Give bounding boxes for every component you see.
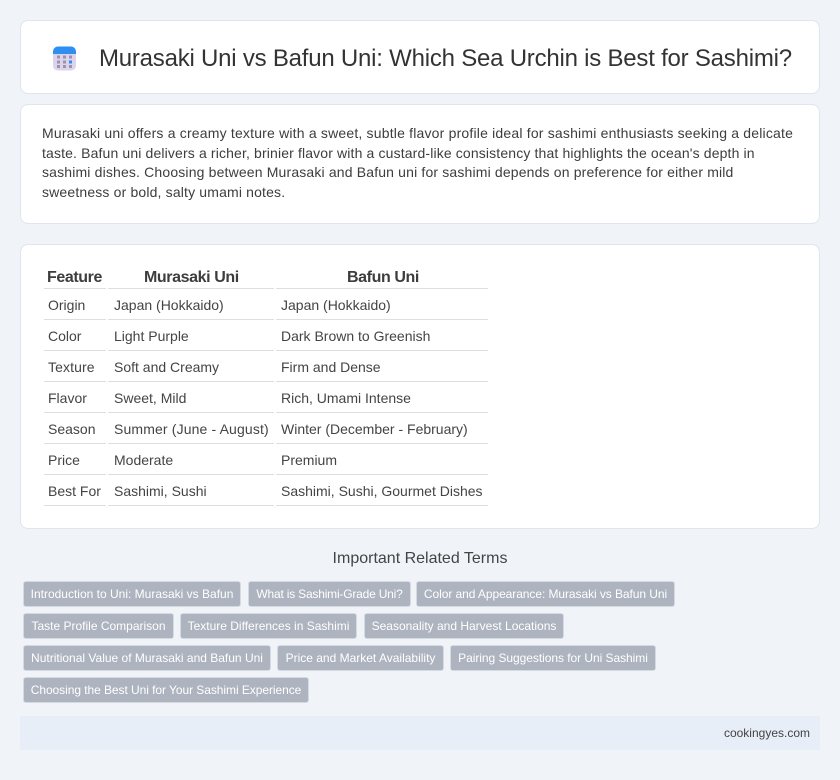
intro paragraph: Murasaki uni offers a creamy texture with a sweet, subtle flavor profile ideal for sashimi enthusiasts seeking a delicate [42, 125, 793, 141]
row: flavor: Sweet, Mild [114, 390, 186, 406]
row: best for: Best For [48, 483, 101, 499]
row: flavor: Flavor [48, 390, 87, 406]
table header: Bafun Uni [347, 269, 419, 286]
related terms heading: Important Related Terms [333, 550, 507, 567]
intro paragraph: sweetness or bold, salty umami notes. [42, 184, 285, 200]
row: season: Winter (December - February) [281, 421, 468, 437]
row: origin: Japan (Hokkaido) [114, 297, 224, 313]
tag [180, 613, 357, 639]
row: texture: Texture [48, 359, 95, 375]
comparison table [44, 269, 488, 506]
row: origin [44, 297, 488, 320]
tag [248, 581, 411, 607]
row: origin: Japan (Hokkaido) [281, 297, 391, 313]
tag [450, 645, 656, 671]
row: texture: Firm and Dense [281, 359, 381, 375]
row: price: Price [48, 452, 80, 468]
row: texture [44, 359, 488, 382]
tag: Texture Differences in Sashimi [188, 619, 349, 633]
row: season: Season [48, 421, 95, 437]
icon: calendar [53, 46, 76, 70]
row: color: Dark Brown to Greenish [281, 328, 430, 344]
row: best for [44, 483, 488, 506]
tag [23, 581, 241, 607]
tag: Nutritional Value of Murasaki and Bafun Uni [31, 651, 263, 665]
tag: Choosing the Best Uni for Your Sashimi Experience [31, 683, 301, 697]
row: price [44, 452, 488, 475]
tag: Seasonality and Harvest Locations [372, 619, 556, 633]
comparison table panel [20, 244, 820, 529]
tag [23, 613, 174, 639]
tag [364, 613, 564, 639]
tag [277, 645, 444, 671]
footer bar [20, 716, 820, 750]
intro paragraph [42, 125, 793, 200]
row: price: Moderate [114, 452, 173, 468]
row: best for: Sashimi, Sushi, Gourmet Dishes [281, 483, 483, 499]
table header: Murasaki Uni [144, 269, 239, 286]
row: best for: Sashimi, Sushi [114, 483, 207, 499]
row: color [44, 328, 488, 351]
row: flavor [44, 390, 488, 413]
row: color: Light Purple [114, 328, 189, 344]
tag [23, 677, 309, 703]
table header: Feature [47, 269, 102, 286]
row: origin: Origin [48, 297, 85, 313]
title: Murasaki Uni vs Bafun Uni: Which Sea Urchin is Best for Sashimi? [99, 45, 792, 72]
tag: What is Sashimi-Grade Uni? [256, 587, 403, 601]
row: price: Premium [281, 452, 337, 468]
related terms tags [23, 581, 675, 703]
tag: Pairing Suggestions for Uni Sashimi [458, 651, 648, 665]
row: texture: Soft and Creamy [114, 359, 219, 375]
intro paragraph: sashimi dishes. Choosing between Murasaki and Bafun uni for sashimi depends on preference for either mild [42, 164, 734, 180]
tag [23, 645, 271, 671]
header panel [20, 20, 820, 94]
tag: Color and Appearance: Murasaki vs Bafun Uni [424, 587, 667, 601]
tag: Taste Profile Comparison [31, 619, 166, 633]
tag: Introduction to Uni: Murasaki vs Bafun [31, 587, 233, 601]
row: color: Color [48, 328, 81, 344]
table header [44, 269, 488, 289]
tag: Price and Market Availability [286, 651, 435, 665]
intro paragraph: taste. Bafun uni delivers a richer, brinier flavor with a custard-like consistency that highlights the ocean's depth in [42, 144, 755, 160]
row: season [44, 421, 488, 444]
intro text panel [20, 104, 820, 224]
row: season: Summer (June - August) [114, 421, 269, 437]
row: flavor: Rich, Umami Intense [281, 390, 411, 406]
source credit: cookingyes.com [724, 726, 810, 740]
tag [416, 581, 675, 607]
